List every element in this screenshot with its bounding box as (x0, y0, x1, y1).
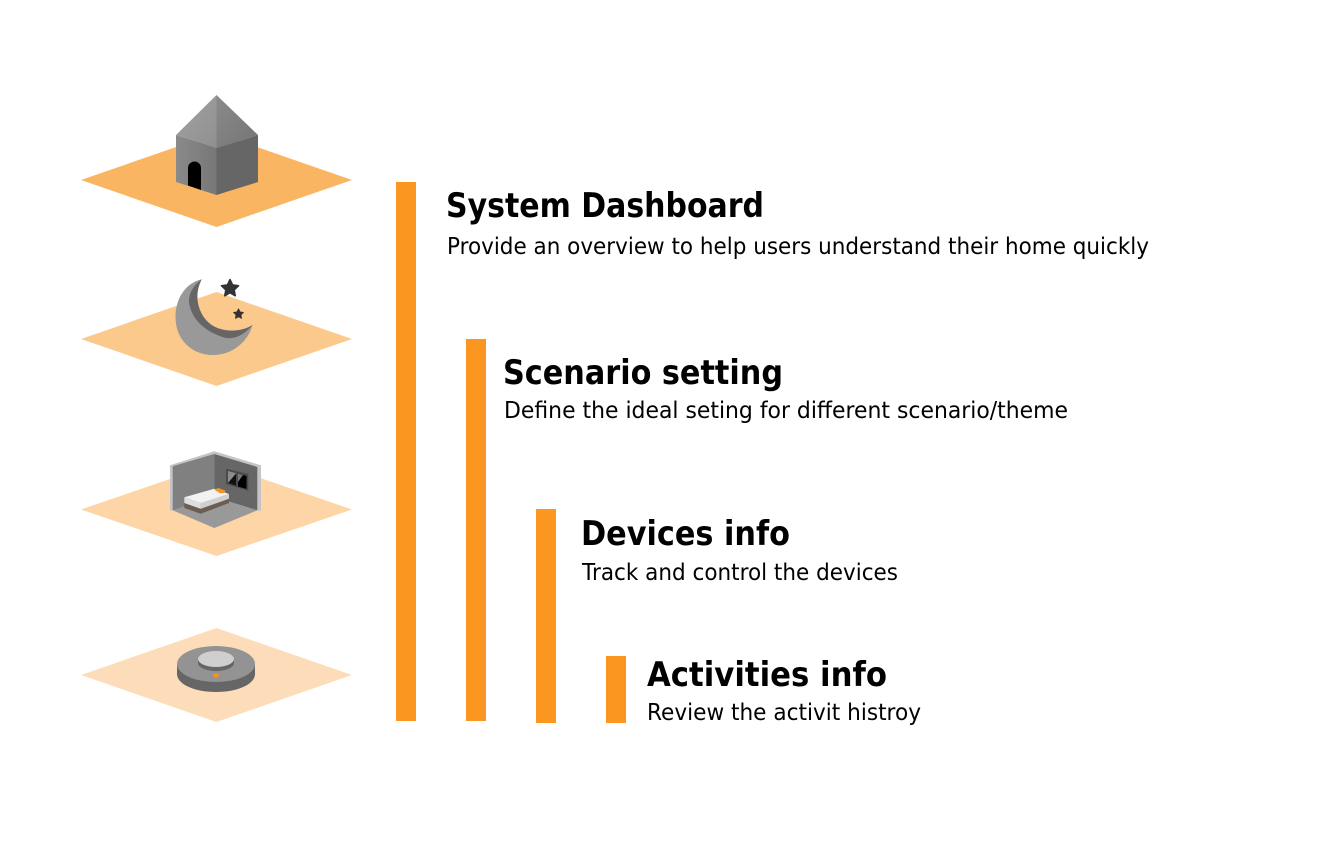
description: Track and control the devices (581, 560, 898, 586)
icon: crescent moon (176, 279, 252, 355)
bar: system dashboard (396, 182, 416, 721)
text block: system dashboard (446, 186, 1149, 260)
heading: System Dashboard (446, 186, 764, 226)
bar: scenario setting (466, 339, 486, 721)
icon: house (176, 95, 258, 195)
icon: large star (221, 280, 239, 296)
heading: Devices info (581, 514, 790, 554)
platform 2 (81, 292, 352, 386)
level 1: house on platform (81, 95, 352, 227)
level 2: moon and stars on platform (81, 279, 352, 386)
text block: activities info (647, 655, 921, 726)
platform 1 (81, 133, 352, 227)
icon: isometric bedroom (170, 451, 261, 528)
text block: devices info (581, 514, 898, 586)
icon: small star (234, 309, 243, 318)
bar: devices info (536, 509, 556, 723)
text block: scenario setting (503, 353, 1068, 424)
heading: Activities info (647, 655, 887, 695)
bar: activities info (606, 656, 626, 723)
level 4: robot vacuum on platform (81, 628, 352, 722)
description: Define the ideal seting for different scenario/theme (504, 398, 1068, 424)
icon: robot vacuum (177, 646, 255, 692)
heading: Scenario setting (503, 353, 783, 393)
description: Review the activit histroy (647, 700, 921, 726)
platform 3 (81, 463, 352, 556)
platform 4 (81, 628, 352, 722)
level 3: room on platform (81, 451, 352, 556)
description: Provide an overview to help users understand their home quickly (447, 234, 1149, 260)
